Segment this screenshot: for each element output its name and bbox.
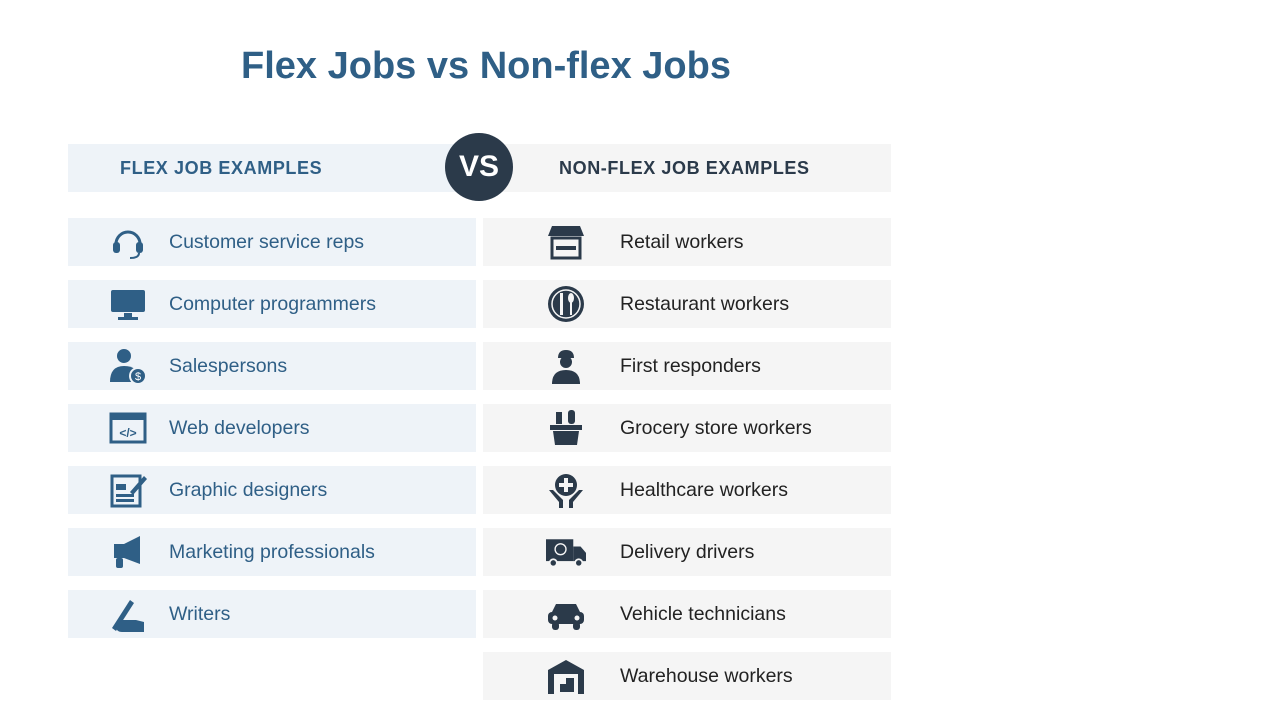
title: Flex Jobs vs Non-flex Jobs	[241, 45, 731, 87]
item: grocery: Grocery store workers	[620, 416, 812, 438]
item: healthcare: Healthcare workers	[620, 478, 788, 500]
item: customer service: Customer service reps	[169, 230, 364, 252]
vs badge: VS	[459, 150, 499, 183]
item: retail	[483, 218, 891, 266]
item: programmers	[68, 280, 476, 328]
item: salespersons	[68, 342, 476, 390]
item: warehouse: Warehouse workers	[620, 664, 793, 686]
item: graphic designers: Graphic designers	[169, 478, 327, 500]
item: first responders	[483, 342, 891, 390]
item: warehouse	[483, 652, 891, 700]
item: retail: Retail workers	[620, 230, 744, 252]
item: graphic designers	[68, 466, 476, 514]
item: customer service	[68, 218, 476, 266]
item: web developers: </>	[119, 426, 137, 440]
item: web developers	[68, 404, 476, 452]
item: restaurant	[483, 280, 891, 328]
header: flex	[68, 144, 476, 192]
item: restaurant: Restaurant workers	[620, 292, 789, 314]
item: writers	[68, 590, 476, 638]
header: non-flex	[483, 144, 891, 192]
item: writers: Writers	[169, 602, 230, 624]
item: delivery	[483, 528, 891, 576]
header: flex: FLEX JOB EXAMPLES	[120, 158, 322, 178]
item: salespersons: $	[135, 371, 141, 383]
item: web developers: Web developers	[169, 416, 310, 438]
item: first responders: First responders	[620, 354, 761, 376]
item: programmers: Computer programmers	[169, 292, 376, 314]
vs badge	[445, 133, 513, 201]
item: grocery	[483, 404, 891, 452]
item: vehicle: Vehicle technicians	[620, 602, 786, 624]
panel: flex jobs	[68, 218, 476, 638]
panel: non-flex jobs	[483, 218, 891, 700]
item: marketing	[68, 528, 476, 576]
item: vehicle	[483, 590, 891, 638]
item: healthcare	[483, 466, 891, 514]
item: delivery: Delivery drivers	[620, 540, 754, 562]
item: salespersons: Salespersons	[169, 354, 287, 376]
item: marketing: Marketing professionals	[169, 540, 375, 562]
header: non-flex: NON-FLEX JOB EXAMPLES	[559, 158, 810, 178]
